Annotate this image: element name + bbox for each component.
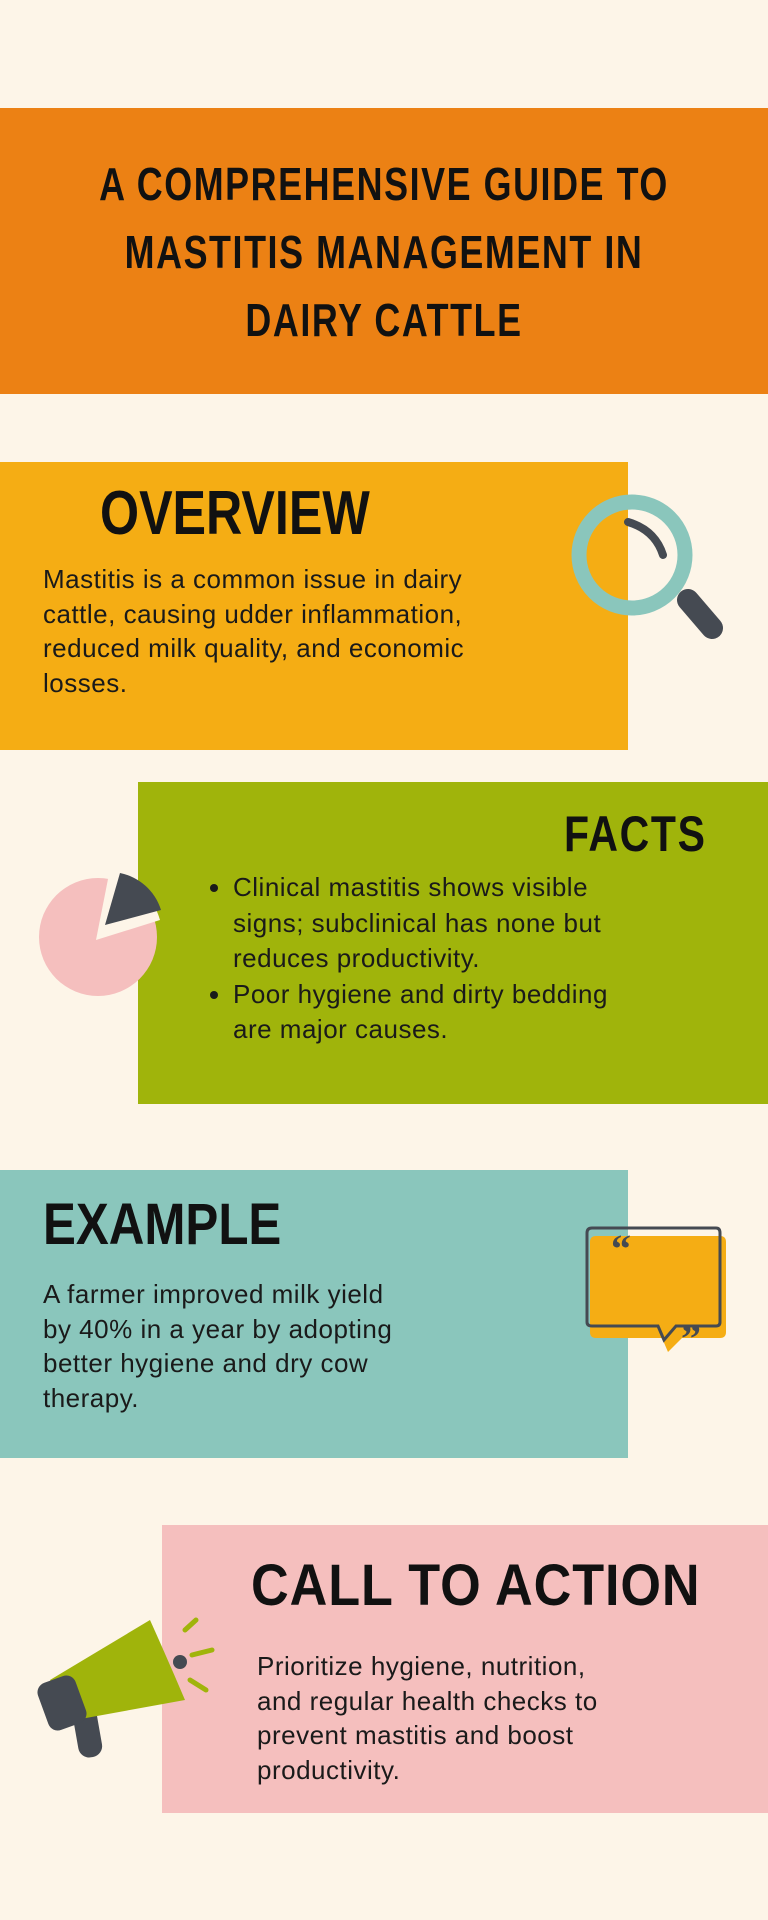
icon: megaphone xyxy=(37,1618,214,1758)
text: call to action: Prioritize hygiene, nutrition, xyxy=(257,1651,586,1681)
icon: pie chart xyxy=(39,873,161,996)
text: facts bullets: signs; subclinical has none but xyxy=(233,908,601,938)
text: example: therapy. xyxy=(43,1382,139,1412)
text: call to action xyxy=(257,1651,598,1784)
text: overview: reduced milk quality, and economic xyxy=(43,633,464,663)
heading: example: EXAMPLE xyxy=(43,1192,281,1257)
icon: speech bubble xyxy=(586,1226,726,1357)
text: example: better hygiene and dry cow xyxy=(43,1348,368,1378)
text: overview: losses. xyxy=(43,668,127,698)
title xyxy=(99,158,669,346)
text: overview: Mastitis is a common issue in dairy xyxy=(43,564,462,594)
title: MASTITIS MANAGEMENT IN xyxy=(125,226,643,278)
panel: call to action xyxy=(162,1525,768,1813)
panel: example xyxy=(0,1170,628,1458)
panel: facts xyxy=(138,782,768,1104)
text: facts bullets xyxy=(210,872,608,1044)
text: example xyxy=(43,1279,392,1412)
text: overview xyxy=(43,564,464,698)
text: example: by 40% in a year by adopting xyxy=(43,1314,392,1344)
text: call to action: prevent mastitis and boost xyxy=(257,1720,574,1750)
text: facts bullets: Clinical mastitis shows visible xyxy=(233,872,588,902)
text: example: A farmer improved milk yield xyxy=(43,1279,384,1309)
heading: facts: FACTS xyxy=(564,806,707,862)
heading: call to action: CALL TO ACTION xyxy=(251,1553,701,1618)
text: facts bullets: are major causes. xyxy=(233,1014,448,1044)
text: facts bullets: Poor hygiene and dirty bedding xyxy=(233,978,608,1008)
icon: speech bubble: “ xyxy=(611,1226,631,1271)
heading: overview: OVERVIEW xyxy=(100,479,370,548)
text: call to action: productivity. xyxy=(257,1754,400,1784)
panel: overview xyxy=(0,462,628,750)
text: call to action: and regular health checks to xyxy=(257,1686,598,1716)
title: DAIRY CATTLE xyxy=(245,294,523,346)
icon: magnifier xyxy=(572,494,723,639)
title banner xyxy=(0,108,768,394)
title: A COMPREHENSIVE GUIDE TO xyxy=(99,158,669,210)
text: facts bullets: reduces productivity. xyxy=(233,943,480,973)
text: overview: cattle, causing udder inflammation, xyxy=(43,598,462,628)
